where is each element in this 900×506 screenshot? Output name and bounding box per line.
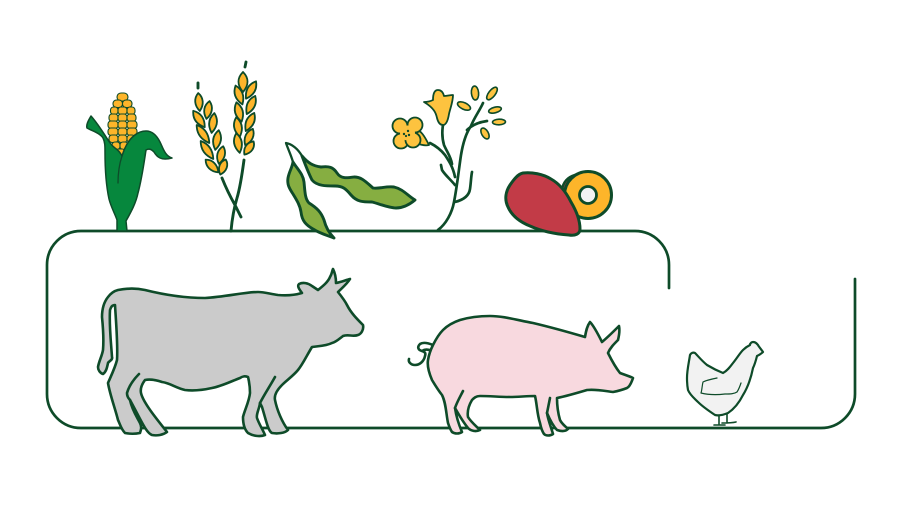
pig tail (409, 343, 433, 365)
frame line (47, 231, 855, 428)
soybean pod right (302, 156, 415, 208)
icon: soybean pods (286, 143, 415, 238)
ring hole (580, 186, 596, 204)
canola stems (430, 103, 487, 230)
cow front leg line (260, 377, 275, 403)
yellow ring (564, 172, 612, 218)
red tuber (506, 173, 580, 235)
wheat left ear (190, 93, 229, 176)
icon: canola plant (392, 86, 506, 230)
soybean pod left (288, 162, 334, 238)
icon: sweet potato and cassava (506, 172, 612, 235)
canola flower (392, 118, 429, 148)
wheat stems (198, 62, 246, 231)
wheat right ear (232, 72, 259, 157)
corn husk fold (118, 156, 122, 183)
canola bell flower (424, 90, 453, 125)
canola buds (456, 86, 506, 140)
pig body (428, 316, 633, 436)
icon: chicken (687, 342, 763, 425)
pod stems (286, 143, 302, 162)
icon: pig (409, 316, 633, 436)
red slice behind (562, 175, 590, 205)
icon: cow (98, 269, 363, 436)
chicken legs (714, 414, 736, 425)
canola flower stamens (403, 130, 410, 137)
corn cob (108, 93, 137, 162)
cow body (98, 269, 363, 436)
canola back petal (416, 129, 429, 145)
canola petals (392, 118, 422, 148)
chicken wing (701, 378, 741, 395)
corn husk (87, 116, 172, 231)
canola flower centre (400, 126, 415, 140)
chicken body (687, 342, 763, 415)
icon: wheat (190, 62, 259, 231)
icon: corn (87, 93, 172, 231)
cow rear leg line (127, 374, 139, 400)
pig leg lines (455, 391, 550, 413)
